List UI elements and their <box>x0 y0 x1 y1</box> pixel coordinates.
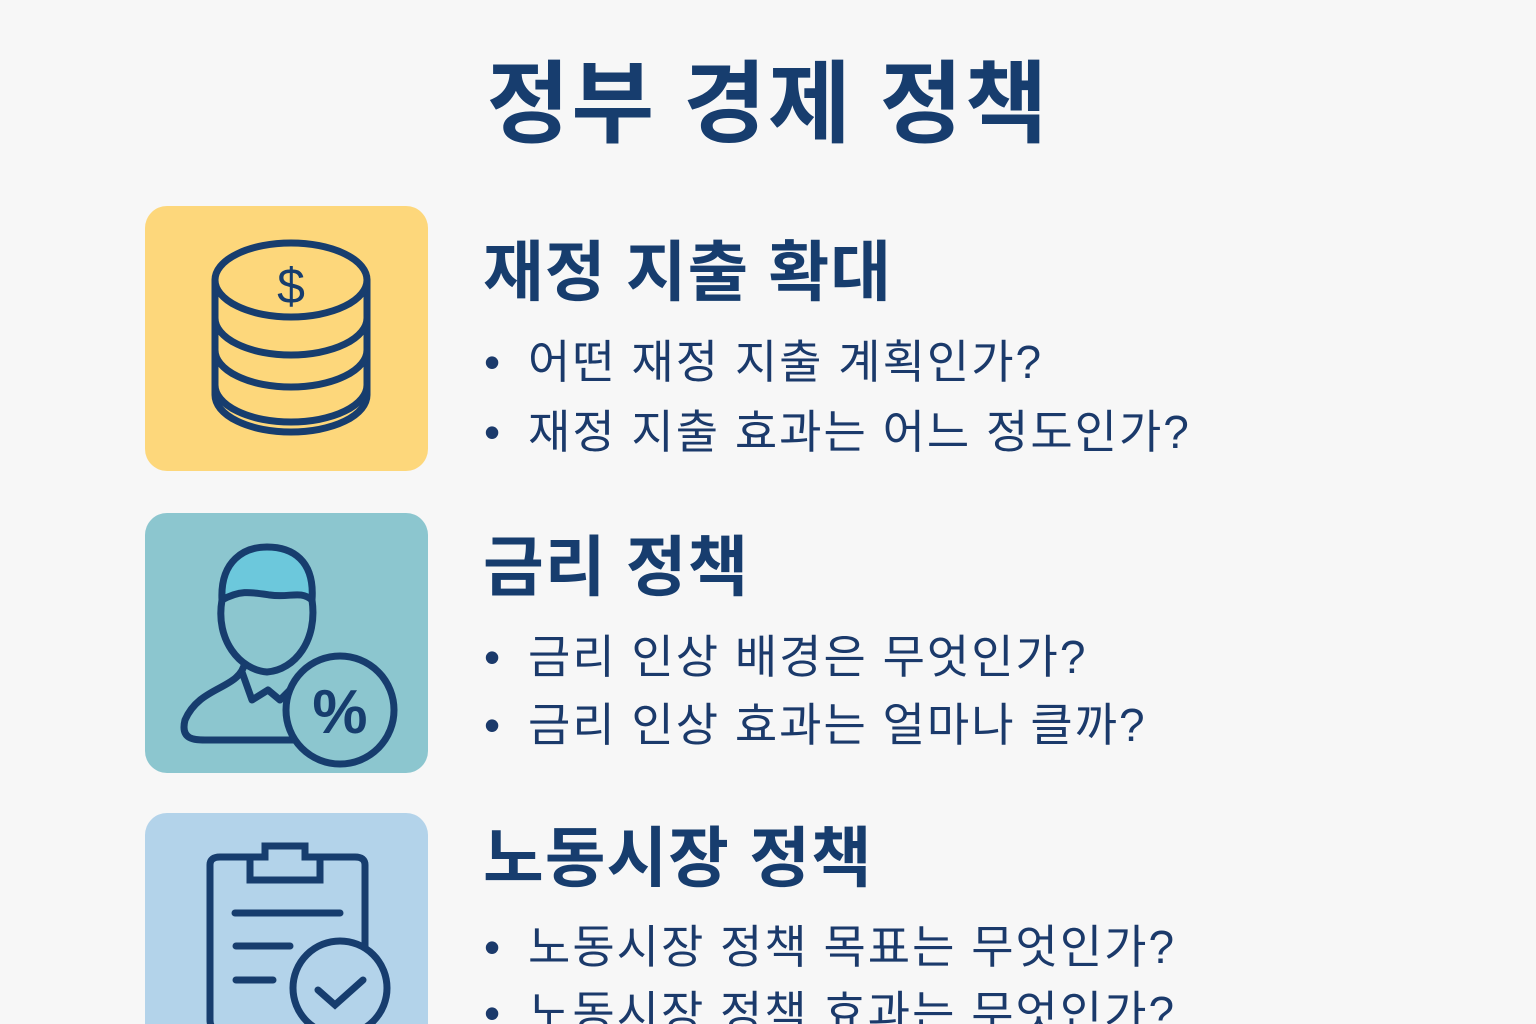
bullets: interest: • <box>484 631 502 683</box>
heading: interest: 금리 정책 <box>483 530 749 604</box>
bullets: fiscal: • <box>484 336 502 388</box>
title: 정부 경제 정책 <box>487 55 1049 155</box>
bullets: labor <box>484 921 1176 1024</box>
panel: fiscal icon box <box>145 206 428 471</box>
bullets: fiscal: 재정 지출 효과는 어느 정도인가? <box>528 406 1191 458</box>
bullets: interest: • <box>484 699 502 751</box>
icon: clipboard check <box>210 846 387 1024</box>
bullets: labor: 노동시장 정책 목표는 무엇인가? <box>528 921 1176 973</box>
bullets: interest: 금리 인상 효과는 얼마나 클까? <box>528 699 1147 751</box>
heading: fiscal: 재정 지출 확대 <box>483 235 892 309</box>
bullets: fiscal: 어떤 재정 지출 계획인가? <box>528 336 1043 388</box>
heading: labor: 노동시장 정책 <box>483 821 873 895</box>
bullets: labor: • <box>484 921 502 973</box>
bullets: fiscal <box>484 336 1191 458</box>
icon: coin stack <box>215 243 367 432</box>
panel: labor icon box <box>145 813 428 1024</box>
bullets: interest: 금리 인상 배경은 무엇인가? <box>528 631 1087 683</box>
icon: coin stack: $ <box>277 258 305 314</box>
panel: interest icon box <box>145 513 428 773</box>
bullets: interest <box>484 631 1147 751</box>
icon: person with percent: % <box>312 678 368 747</box>
icons panel set <box>145 206 428 1024</box>
bullets: fiscal: • <box>484 406 502 458</box>
icon: person with percent <box>184 547 394 764</box>
